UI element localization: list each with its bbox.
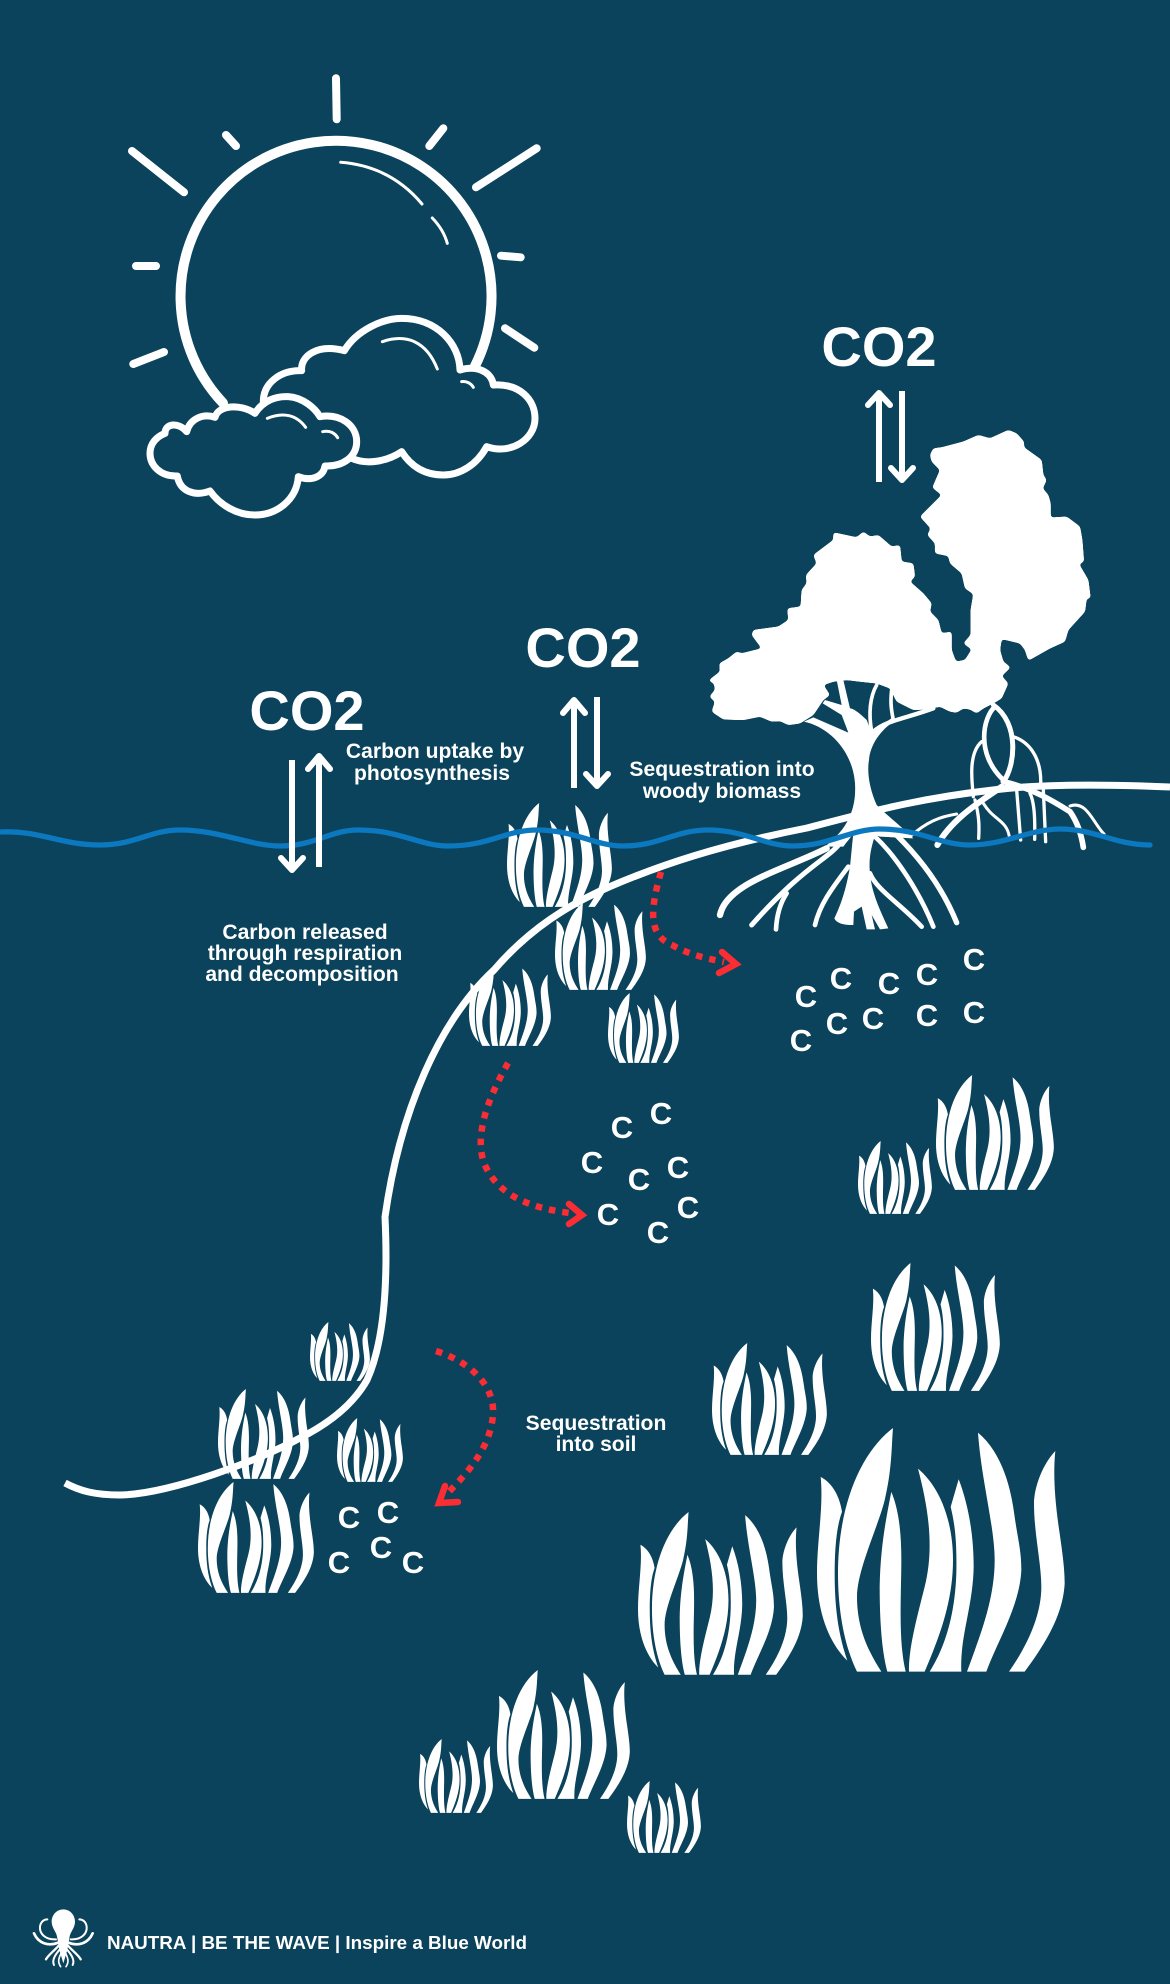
carbon cluster: soil: C	[370, 1530, 392, 1565]
carbon cluster: soil: C	[377, 1495, 399, 1530]
heading: CO2 seagrass: CO2	[525, 616, 641, 679]
carbon cluster: biomass: C	[963, 995, 985, 1030]
carbon cluster: mid slope	[581, 1096, 699, 1250]
label: soil: Sequestration	[526, 1412, 666, 1435]
carbon cluster: biomass: C	[790, 1023, 812, 1058]
carbon cluster: mid slope: C	[611, 1110, 633, 1145]
carbon cluster: soil	[328, 1495, 424, 1580]
carbon cluster: soil: C	[338, 1500, 360, 1535]
carbon cluster: mid slope: C	[650, 1096, 672, 1131]
label: carbon released: and decomposition	[205, 963, 399, 986]
carbon cluster: biomass: C	[916, 998, 938, 1033]
label: woody biomass: woody biomass	[642, 780, 801, 803]
seagrass tufts	[198, 803, 1065, 1853]
carbon cluster: mid slope: C	[647, 1215, 669, 1250]
carbon cluster: mid slope: C	[667, 1150, 689, 1185]
label: soil: into soil	[556, 1433, 636, 1456]
carbon cluster: mid slope: C	[581, 1145, 603, 1180]
icon: sun	[132, 78, 537, 403]
water surface wave	[0, 829, 1150, 846]
carbon cluster: biomass	[790, 942, 985, 1058]
heading: CO2 water: CO2	[249, 679, 365, 742]
back tree roots	[910, 705, 1104, 847]
arrows: CO2 exchange seagrass	[563, 697, 608, 788]
carbon cluster: biomass: C	[830, 961, 852, 996]
tree canopy	[708, 430, 1091, 725]
carbon cluster: biomass: C	[963, 942, 985, 977]
tree roots and branches	[720, 685, 957, 929]
footer tagline: NAUTRA | BE THE WAVE | Inspire a Blue World	[107, 1932, 527, 1953]
carbon cluster: mid slope: C	[597, 1197, 619, 1232]
carbon cluster: biomass: C	[916, 957, 938, 992]
carbon cluster: soil: C	[328, 1545, 350, 1580]
arrow: to soil carbon	[436, 1351, 493, 1503]
icon: octopus logo	[34, 1909, 93, 1967]
mangrove trees	[708, 430, 1104, 929]
arrows: CO2 exchange mangrove	[868, 391, 913, 482]
arrow: to seagrass carbon	[481, 1063, 582, 1224]
carbon cluster: biomass: C	[878, 966, 900, 1001]
label: carbon released: Carbon released	[222, 921, 388, 944]
tree trunk and central roots	[804, 680, 913, 929]
label: carbon released: through respiration	[208, 942, 402, 965]
carbon cluster: biomass: C	[826, 1006, 848, 1041]
carbon cluster: biomass: C	[862, 1001, 884, 1036]
arrow: to biomass carbon	[653, 872, 736, 973]
carbon cluster: biomass: C	[795, 979, 817, 1014]
coastline slope	[65, 785, 1170, 1495]
icon: clouds	[150, 318, 535, 515]
label: woody biomass: Sequestration into	[629, 758, 815, 781]
arrows: CO2 exchange water	[281, 756, 330, 870]
heading: CO2 mangrove: CO2	[821, 315, 937, 378]
label: carbon uptake: photosynthesis	[354, 762, 510, 785]
carbon cluster: soil: C	[402, 1545, 424, 1580]
carbon cluster: mid slope: C	[677, 1190, 699, 1225]
carbon cluster: mid slope: C	[628, 1162, 650, 1197]
label: carbon uptake: Carbon uptake by	[346, 740, 524, 763]
